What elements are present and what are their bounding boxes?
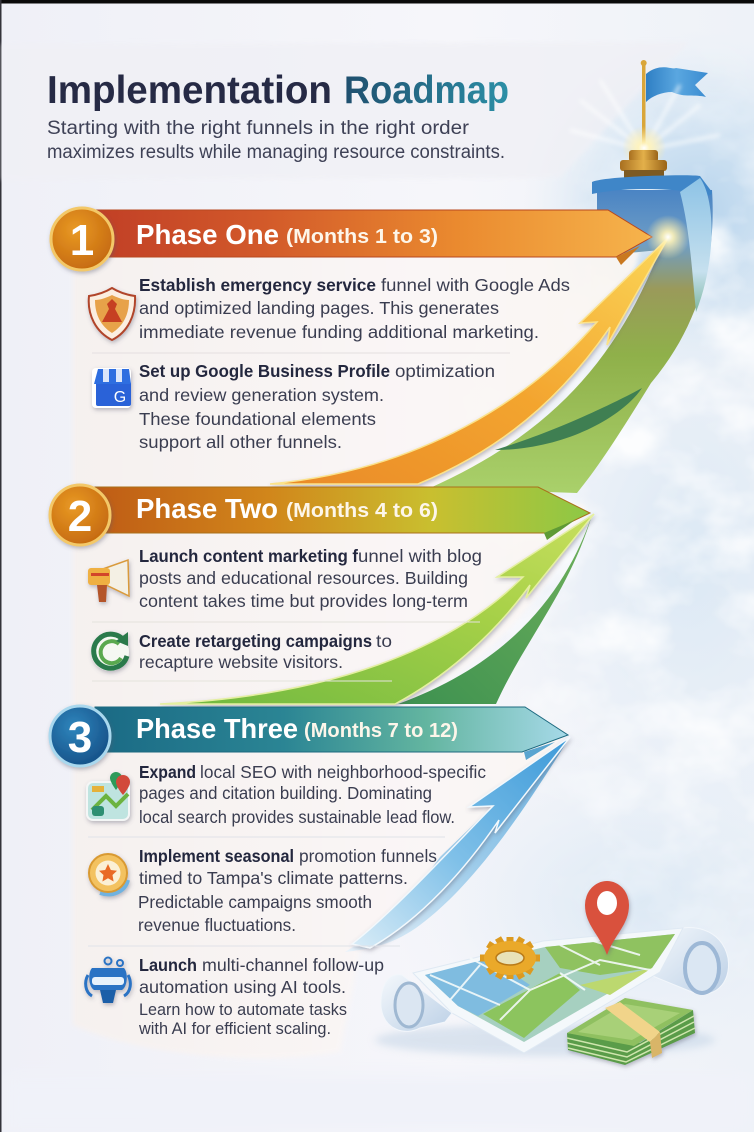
phase three item 1 text: local search provides sustainable lead flow.: [139, 807, 455, 827]
ribbon dark strip: [495, 388, 642, 450]
phase one item 2 text: and review generation system.: [139, 385, 384, 405]
map roads: [430, 940, 650, 1020]
sparkle: [646, 215, 690, 259]
phase three item 2 text: Predictable campaigns smooth: [138, 892, 372, 912]
flag pole: [642, 64, 646, 154]
subtitle: Starting with the right funnels in the right order: [47, 118, 470, 139]
heading: (Months 1 to 3): [286, 226, 438, 248]
ribbon behind phase two arrow: [398, 515, 592, 704]
number badge: 2: [68, 492, 92, 541]
tower cap and curl: [592, 175, 712, 312]
subtitle: maximizes results while managing resource constraints.: [47, 142, 505, 163]
content panel: [73, 250, 640, 1058]
heading: Phase Two: [136, 493, 278, 524]
pedestal: [629, 150, 658, 162]
phase three item 1 text: Expand: [139, 762, 196, 782]
phase one item 2 text: [139, 361, 495, 452]
heading: [136, 713, 458, 744]
title: Implementation: [47, 69, 332, 112]
phase two item 1 text: Launch content marketing f: [139, 546, 358, 566]
bar: [95, 487, 590, 533]
summit tower with flag: [570, 60, 720, 179]
gear: [480, 937, 540, 979]
heading: (Months 7 to 12): [304, 720, 458, 742]
phase three item 2 text: Implement seasonal: [139, 846, 294, 866]
phase one item 2 text: support all other funnels.: [139, 432, 342, 452]
phase three item 1 text: local SEO with neighborhood-specific: [200, 762, 486, 782]
header band: [2, 42, 690, 180]
phase one item 1 text: Establish emergency service: [139, 275, 376, 295]
title: [47, 69, 509, 112]
phase three item 3 text: with AI for efficient scaling.: [138, 1020, 331, 1038]
phase one header: [51, 208, 690, 270]
left roll: [381, 975, 452, 1031]
phase one item 1 text: [139, 275, 570, 342]
heading: [136, 493, 438, 524]
light rays: [570, 80, 720, 150]
number badge: 1: [70, 216, 94, 265]
location pin: [585, 881, 629, 955]
phase one item 2 text: optimization: [395, 361, 495, 381]
shadow: [375, 1024, 715, 1056]
phase three item 3 icon: automation robot: [86, 958, 130, 1003]
phase three item 3 text: multi-channel follow-up: [202, 955, 384, 975]
map illustration: [375, 881, 729, 1065]
divider: [88, 836, 445, 838]
phase two item 2 text: Create retargeting campaigns: [139, 631, 372, 651]
phase three header: [50, 706, 568, 766]
panel left edge: [72, 255, 74, 1025]
phase two header: [50, 485, 590, 545]
title: Roadmap: [344, 69, 509, 112]
bar fold: [524, 742, 555, 760]
ribbon behind phase three arrow: [345, 737, 570, 952]
bar: [95, 210, 652, 257]
phase one item 1 text: and optimized landing pages. This generates: [139, 298, 499, 318]
phase three item 3 text: automation using AI tools.: [139, 977, 346, 997]
phase three item 1 text: pages and citation building. Dominating: [139, 783, 432, 803]
phase two item 2 text: to: [376, 631, 392, 651]
number badge: [50, 485, 110, 545]
phase three item 3 text: [138, 955, 384, 1038]
money stack: [567, 998, 695, 1065]
phase three item 1 text: [139, 762, 486, 827]
phase one item 2 icon: business profile: [92, 368, 131, 408]
right roll: [650, 928, 729, 994]
phase one item 1 icon: shield: [89, 288, 135, 340]
arrow: phase three: [352, 737, 570, 948]
tower and ribbon behind phase one arrow: [430, 190, 713, 493]
phase two item 2 text: [139, 631, 392, 672]
phase one item 1 text: funnel with Google Ads: [381, 275, 570, 295]
number badge: [50, 706, 110, 766]
phase three item 2 text: promotion funnels: [299, 846, 437, 866]
phase one item 2 text: Set up Google Business Profile: [139, 361, 390, 381]
money band: [605, 1002, 660, 1042]
phase three item 2 icon: seasonal star: [89, 854, 128, 894]
pin hole: [597, 891, 617, 915]
phase two item 1 text: content takes time but provides long-term: [139, 591, 468, 611]
phase three item 3 text: Learn how to automate tasks: [139, 1001, 347, 1019]
divider: [92, 352, 510, 354]
heading: [136, 219, 438, 250]
background: [527, 59, 754, 994]
phase three item 2 text: [138, 846, 437, 935]
arrow: phase one: [270, 238, 668, 484]
phase three item 1 icon: local map: [87, 772, 130, 820]
phase two item 2 text: recapture website visitors.: [139, 652, 343, 672]
heading: Phase Three: [136, 713, 298, 744]
phase three item 3 text: Launch: [139, 955, 197, 975]
heading: Phase One: [136, 219, 279, 250]
left frame edge: [0, 0, 2, 1132]
number badge: 3: [68, 713, 92, 762]
bar fold: [544, 520, 575, 540]
heading: (Months 4 to 6): [286, 500, 438, 522]
top frame edge: [0, 0, 754, 4]
phase one item 1 text: immediate revenue funding additional marketing.: [139, 322, 539, 342]
divider: [92, 680, 392, 682]
map sheet: [413, 928, 683, 1053]
number badge: [51, 208, 113, 270]
subtitle: [47, 118, 505, 163]
map land and water: [425, 934, 675, 1042]
divider: [88, 946, 400, 947]
phase one item 2 text: These foundational elements: [139, 409, 376, 429]
phase two item 1 text: [139, 546, 482, 611]
phase two item 1 icon: megaphone: [88, 560, 129, 602]
phase one item 2 icon: business profile: G: [114, 389, 126, 406]
phase two item 1 text: unnel with blog: [358, 546, 482, 566]
divider: [92, 622, 480, 623]
flag: [646, 67, 708, 102]
phase three item 2 text: revenue fluctuations.: [138, 915, 296, 935]
phase two item 1 text: posts and educational resources. Building: [139, 568, 468, 588]
phase two item 2 icon: retargeting: [91, 632, 129, 671]
bar fold: [616, 246, 640, 265]
phase three item 2 text: timed to Tampa's climate patterns.: [139, 868, 408, 888]
arrow: phase two: [160, 514, 594, 704]
bar: [95, 707, 568, 752]
